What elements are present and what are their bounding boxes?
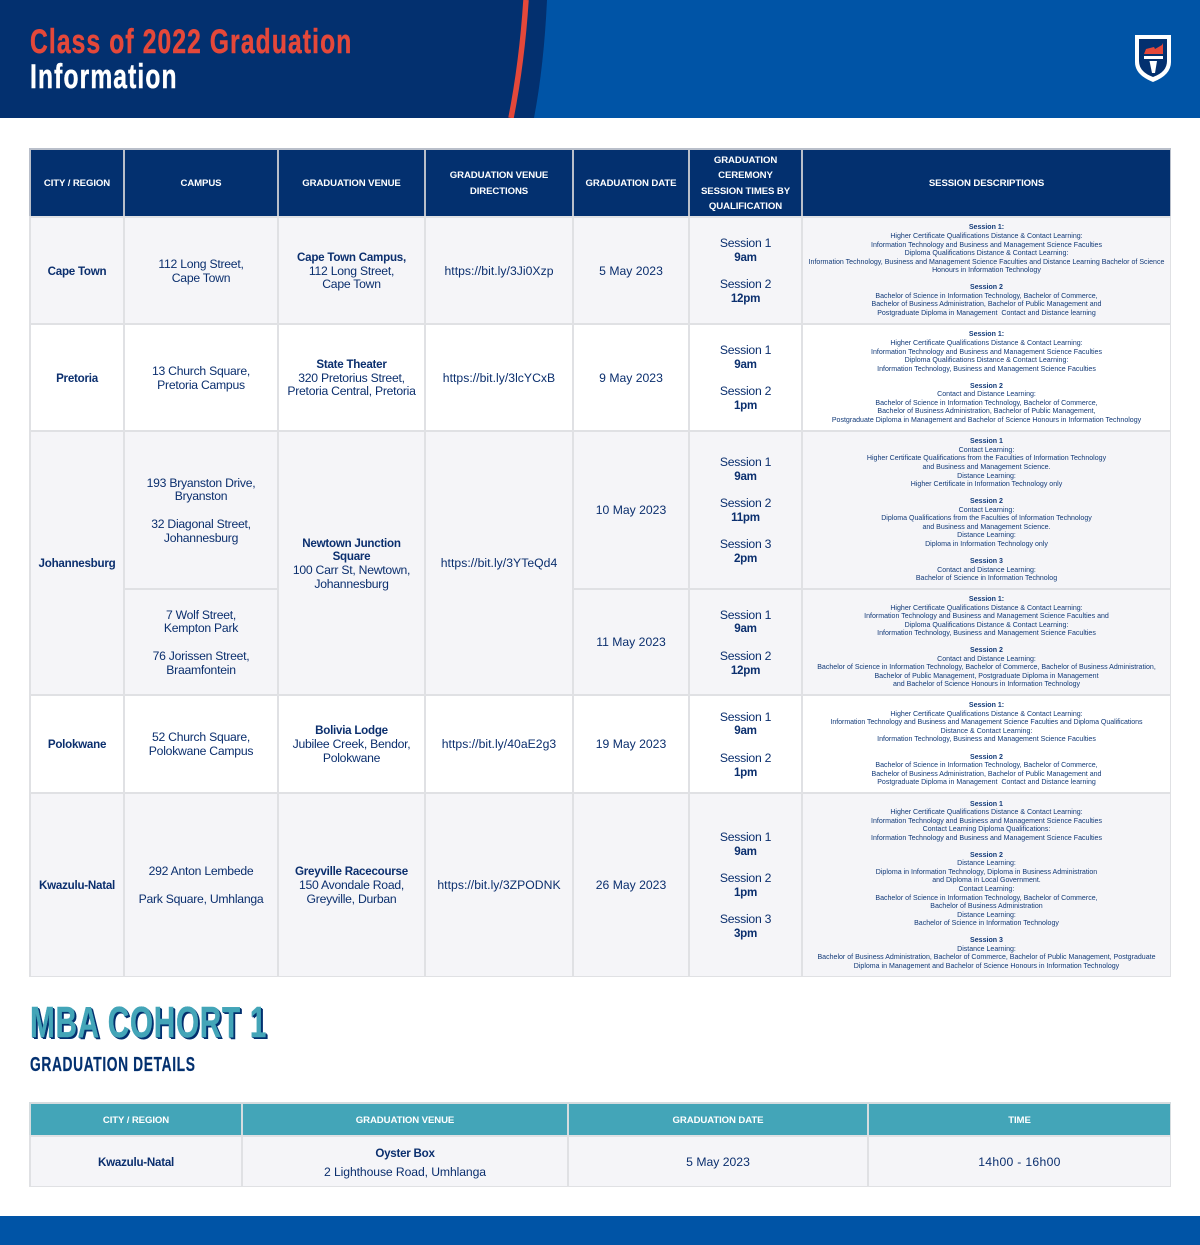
row: Kwazulu-Natal: Contact Learning Diploma Qualifications: <box>923 826 1050 833</box>
MBA table header: GRADUATION DATE <box>673 1115 763 1126</box>
row: Kwazulu-Natal: 9am <box>734 845 757 858</box>
subheading: graduation details: GRADUATION DETAILS <box>30 1054 196 1076</box>
row: Kwazulu-Natal: 150 Avondale Road, <box>299 878 404 892</box>
row: Pretoria: Contact and Distance Learning: <box>937 391 1036 398</box>
row: Polokwane: Information Technology, Business and Management Science Faculties <box>877 736 1096 743</box>
row: Pretoria: 9am <box>734 358 757 371</box>
row: Kwazulu-Natal: Bachelor of Business Administration, Bachelor of Commerce, Bachelor of Public Management, Postgraduate <box>817 954 1156 961</box>
row: Johannesburg: Session 2 <box>970 498 1003 505</box>
row: Cape Town: 112 Long Street, <box>158 257 244 271</box>
row: Polokwane: 1pm <box>734 766 757 779</box>
row: Polokwane: 9am <box>734 724 757 737</box>
row: Johannesburg: Square <box>333 550 370 563</box>
table header row: DIRECTIONS <box>470 186 528 196</box>
row: Johannesburg: Higher Certificate Qualifications Distance & Contact Learning: <box>890 605 1083 612</box>
row: Cape Town: Information Technology and Business and Management Science Faculties <box>871 242 1102 249</box>
row: Kwazulu-Natal: Information Technology and Business and Management Science Faculties <box>871 835 1102 842</box>
row: Polokwane <box>29 695 1171 792</box>
row: Cape Town: Higher Certificate Qualifications Distance & Contact Learning: <box>890 233 1083 240</box>
row: Cape Town: Honours in Information Technology <box>932 267 1041 274</box>
row: Cape Town: Session 1 <box>720 236 771 250</box>
row: Kwazulu-Natal: Diploma in Management and Bachelor of Science Honours in Information Technology <box>854 963 1119 970</box>
MBA table row: Oyster Box <box>375 1147 435 1160</box>
row: Johannesburg: 32 Diagonal Street, <box>151 517 251 531</box>
row: Johannesburg: Johannesburg <box>39 557 115 570</box>
row: Johannesburg: Contact Learning: <box>959 447 1014 454</box>
row: Johannesburg: Bachelor of Science in Information Technology, Bachelor of Commerce, Bachelor of Business Administration, <box>817 664 1156 671</box>
row: Johannesburg: and Business and Management Science. <box>922 464 1051 471</box>
header banner <box>0 0 1200 118</box>
row: Cape Town: https://bit.ly/3Ji0Xzp <box>444 264 554 278</box>
row: Cape Town: Session 2 <box>970 284 1003 291</box>
row: Johannesburg: Session 3 <box>720 537 771 551</box>
row: Polokwane: https://bit.ly/40aE2g3 <box>442 737 556 751</box>
row: Kwazulu-Natal: Distance Learning: <box>957 912 1016 919</box>
row: Kwazulu-Natal: 3pm <box>734 927 757 940</box>
row: Kwazulu-Natal: https://bit.ly/3ZPODNK <box>437 878 561 892</box>
MBA table row <box>29 1135 1171 1187</box>
row: Cape Town: Bachelor of Business Administration, Bachelor of Public Management and <box>872 301 1101 308</box>
row: Polokwane: Information Technology and Business and Management Science Faculties and Diploma Qualifications <box>830 719 1143 726</box>
row: Kwazulu-Natal: Information Technology and Business and Management Science Faculties <box>871 818 1102 825</box>
row: Kwazulu-Natal: Bachelor of Science in Information Technology, Bachelor of Commerce, <box>875 895 1098 902</box>
title: Class of 2022 Graduation <box>30 23 352 61</box>
row: Cape Town: Session 1: <box>969 224 1004 231</box>
row: Johannesburg: Bachelor of Science in Information Technolog <box>916 575 1057 582</box>
row: Cape Town: Cape Town <box>322 277 381 291</box>
row: Cape Town: Cape Town Campus, <box>297 251 406 264</box>
row: Pretoria: Bachelor of Science in Information Technology, Bachelor of Commerce, <box>875 400 1098 407</box>
row: Johannesburg: and Bachelor of Science Honours in Information Technology <box>893 681 1080 688</box>
row: Kwazulu-Natal: Distance Learning: <box>957 860 1016 867</box>
row: Pretoria: Session 2 <box>720 384 771 398</box>
row: Kwazulu-Natal: Session 1 <box>970 801 1003 808</box>
row: Pretoria: Postgraduate Diploma in Management and Bachelor of Science Honours in Information Technology <box>832 417 1141 424</box>
row: Kwazulu-Natal: Diploma in Information Technology, Diploma in Business Administration <box>876 869 1097 876</box>
MBA table row: 2 Lighthouse Road, Umhlanga <box>324 1165 486 1179</box>
row: Kwazulu-Natal: Kwazulu-Natal <box>39 879 115 892</box>
row: Kwazulu-Natal: Greyville, Durban <box>307 892 396 906</box>
row: Pretoria: 1pm <box>734 399 757 412</box>
row: Johannesburg <box>29 431 1171 694</box>
row: Johannesburg: Bryanston <box>175 489 227 503</box>
MBA table header: CITY / REGION <box>103 1115 169 1126</box>
row: Polokwane: Session 1: <box>969 702 1004 709</box>
row: Johannesburg: Contact and Distance Learning: <box>937 567 1036 574</box>
row: Johannesburg: Session 3 <box>970 558 1003 565</box>
MBA table row: Kwazulu-Natal <box>98 1156 174 1169</box>
row: Kwazulu-Natal: Distance Learning: <box>957 946 1016 953</box>
row: Kwazulu-Natal: 292 Anton Lembede <box>149 864 253 878</box>
row: Pretoria: Session 1: <box>969 331 1004 338</box>
row: Cape Town: 5 May 2023 <box>599 264 663 278</box>
table header row: CITY / REGION <box>44 178 110 189</box>
row: Pretoria: Session 1 <box>720 343 771 357</box>
row: Johannesburg: https://bit.ly/3YTeQd4 <box>441 556 557 570</box>
row: Pretoria: 320 Pretorius Street, <box>298 371 405 385</box>
row: Pretoria: Pretoria Central, Pretoria <box>287 384 416 398</box>
table header row: CAMPUS <box>180 178 221 189</box>
row: Pretoria: Pretoria Campus <box>157 378 245 392</box>
row: Polokwane: Bachelor of Business Administration, Bachelor of Public Management and <box>872 771 1101 778</box>
icon: torch shield logo <box>1135 35 1171 82</box>
row: Pretoria: 13 Church Square, <box>152 364 250 378</box>
row: Kwazulu-Natal: Session 2 <box>970 852 1003 859</box>
row: Cape Town: Session 2 <box>720 277 771 291</box>
table header row: GRADUATION VENUE <box>302 178 401 189</box>
table header row: CEREMONY <box>718 170 773 181</box>
row: Johannesburg: 11 May 2023 <box>596 635 666 649</box>
MBA table header <box>29 1102 1171 1135</box>
row: Pretoria: Bachelor of Business Administration, Bachelor of Public Management, <box>877 408 1096 415</box>
row: Pretoria: Information Technology and Business and Management Science Faculties <box>871 349 1102 356</box>
row: Johannesburg: Higher Certificate in Information Technology only <box>911 481 1062 488</box>
MBA table header: TIME <box>1008 1115 1031 1126</box>
row: Kwazulu-Natal: Bachelor of Business Administration <box>930 903 1043 910</box>
row: Johannesburg: and Business and Management Science. <box>922 524 1051 531</box>
row: Johannesburg: 12pm <box>731 664 760 677</box>
MBA table header: GRADUATION VENUE <box>356 1115 454 1126</box>
row: Johannesburg: Higher Certificate Qualifications from the Faculties of Information Technology <box>867 455 1106 462</box>
table header row: QUALIFICATION <box>709 201 782 212</box>
row: Cape Town: Cape Town <box>172 270 230 284</box>
row: Johannesburg: Kempton Park <box>164 621 238 635</box>
row: Johannesburg: Contact Learning: <box>959 507 1014 514</box>
row: Polokwane: Postgraduate Diploma in Management Contact and Distance learning <box>877 779 1096 786</box>
row: Cape Town <box>29 216 1171 323</box>
row: Johannesburg: Diploma Qualifications Distance & Contact Learning: <box>905 622 1068 629</box>
table header row: GRADUATION DATE <box>586 178 676 189</box>
row: Pretoria: Information Technology, Business and Management Science Faculties <box>877 366 1096 373</box>
row: Johannesburg: 11pm <box>731 511 760 524</box>
table header row <box>29 148 1171 216</box>
MBA table row: 5 May 2023 <box>686 1155 750 1169</box>
row: Kwazulu-Natal: 26 May 2023 <box>596 878 666 892</box>
row: Polokwane: Session 2 <box>970 754 1003 761</box>
row: Polokwane: Session 1 <box>720 710 771 724</box>
row: Kwazulu-Natal: Bachelor of Science in Information Technology <box>914 920 1059 927</box>
row: Johannesburg: Distance Learning: <box>957 473 1016 480</box>
row: Johannesburg: Session 1 <box>970 438 1003 445</box>
row: Johannesburg: Johannesburg <box>314 577 389 591</box>
row: Kwazulu-Natal <box>29 793 1171 977</box>
row: Johannesburg: 9am <box>734 470 757 483</box>
row: Johannesburg: Session 1: <box>969 596 1004 603</box>
row: Johannesburg: 100 Carr St, Newtown, <box>293 563 410 577</box>
row: Kwazulu-Natal: Higher Certificate Qualifications Distance & Contact Learning: <box>890 809 1083 816</box>
heading: MBA Cohort 1: MBA COHORT 1 <box>30 998 267 1047</box>
row: Johannesburg: Session 2 <box>970 647 1003 654</box>
row: Polokwane: 52 Church Square, <box>152 730 250 744</box>
table header row: SESSION TIMES BY <box>701 186 790 196</box>
row: Johannesburg: 7 Wolf Street, <box>166 608 236 622</box>
row: Pretoria: 9 May 2023 <box>599 371 663 385</box>
row: Johannesburg: 76 Jorissen Street, <box>153 649 249 663</box>
row: Cape Town: Bachelor of Science in Information Technology, Bachelor of Commerce, <box>875 293 1098 300</box>
row: Cape Town: Postgraduate Diploma in Management Contact and Distance learning <box>877 310 1096 317</box>
row: Johannesburg: Session 2 <box>720 496 771 510</box>
row: Johannesburg: 2pm <box>734 552 757 565</box>
MBA table row: 14h00 - 16h00 <box>978 1155 1061 1169</box>
table header row: SESSION DESCRIPTIONS <box>929 178 1044 189</box>
row: Johannesburg: Distance Learning: <box>957 532 1016 539</box>
row: Polokwane: Polokwane <box>323 751 380 765</box>
row: Kwazulu-Natal: 1pm <box>734 886 757 899</box>
row: Polokwane: Jubilee Creek, Bendor, <box>293 737 410 751</box>
row: Cape Town: Diploma Qualifications Distance & Contact Learning: <box>905 250 1068 257</box>
row: Pretoria: Higher Certificate Qualifications Distance & Contact Learning: <box>890 340 1083 347</box>
table header row: GRADUATION VENUE <box>450 170 548 181</box>
row: Cape Town: Information Technology, Business and Management Science Faculties and Distance Learning Bachelor of Science <box>809 259 1164 266</box>
row: Kwazulu-Natal: Session 2 <box>720 871 771 885</box>
row: Cape Town: 9am <box>734 251 757 264</box>
row: Johannesburg: 10 May 2023 <box>596 503 666 517</box>
row: Johannesburg: Braamfontein <box>166 663 236 677</box>
row: Johannesburg: Contact and Distance Learning: <box>937 656 1036 663</box>
row: Cape Town: 12pm <box>731 292 760 305</box>
title second line: Information <box>30 58 178 96</box>
row: Polokwane: Higher Certificate Qualifications Distance & Contact Learning: <box>890 711 1083 718</box>
row: Johannesburg: 9am <box>734 622 757 635</box>
row: Kwazulu-Natal: Park Square, Umhlanga <box>139 892 263 906</box>
row: Johannesburg: Bachelor of Public Management, Postgraduate Diploma in Management <box>874 673 1099 680</box>
row: Johannesburg: Newtown Junction <box>302 537 401 550</box>
row: Kwazulu-Natal: Greyville Racecourse <box>295 865 408 878</box>
row: Johannesburg: Information Technology, Business and Management Science Faculties <box>877 630 1096 637</box>
row: Johannesburg: 193 Bryanston Drive, <box>147 476 255 490</box>
row: Polokwane: Distance & Contact Learning: <box>941 728 1032 735</box>
row: Johannesburg: Session 1 <box>720 455 771 469</box>
row: Pretoria <box>29 324 1171 430</box>
row: Johannesburg: Diploma in Information Technology only <box>925 541 1048 548</box>
row: Johannesburg: Johannesburg <box>164 531 238 545</box>
row: Johannesburg: Diploma Qualifications from the Faculties of Information Technology <box>881 515 1092 522</box>
row: Polokwane: Bachelor of Science in Information Technology, Bachelor of Commerce, <box>875 762 1098 769</box>
row: Cape Town: Cape Town <box>48 265 106 278</box>
row: Cape Town: 112 Long Street, <box>309 264 394 278</box>
row: Kwazulu-Natal: and Diploma in Local Government. <box>932 877 1041 884</box>
row: Johannesburg: Session 1 <box>720 608 771 622</box>
main schedule table <box>29 148 1171 977</box>
row: Kwazulu-Natal: Session 1 <box>720 830 771 844</box>
row: Pretoria: Diploma Qualifications Distance & Contact Learning: <box>905 357 1068 364</box>
footer bar <box>0 1216 1200 1245</box>
row: Pretoria: State Theater <box>316 358 387 371</box>
row: Johannesburg: Information Technology and Business and Management Science Faculties and <box>864 613 1109 620</box>
row: Polokwane: Bolivia Lodge <box>315 724 388 737</box>
row: Polokwane: Session 2 <box>720 751 771 765</box>
row: Kwazulu-Natal: Contact Learning: <box>959 886 1014 893</box>
row: Polokwane: Polokwane Campus <box>149 744 253 758</box>
row: Polokwane: 19 May 2023 <box>596 737 666 751</box>
row: Johannesburg: Session 2 <box>720 649 771 663</box>
table header row: GRADUATION <box>714 155 777 166</box>
MBA details table <box>29 1102 1171 1187</box>
row: Pretoria: Session 2 <box>970 383 1003 390</box>
row: Pretoria: https://bit.ly/3lcYCxB <box>443 371 555 385</box>
row: Kwazulu-Natal: Session 3 <box>720 912 771 926</box>
row: Kwazulu-Natal: Session 3 <box>970 937 1003 944</box>
row: Polokwane: Polokwane <box>48 738 106 751</box>
row: Pretoria: Pretoria <box>56 372 98 385</box>
